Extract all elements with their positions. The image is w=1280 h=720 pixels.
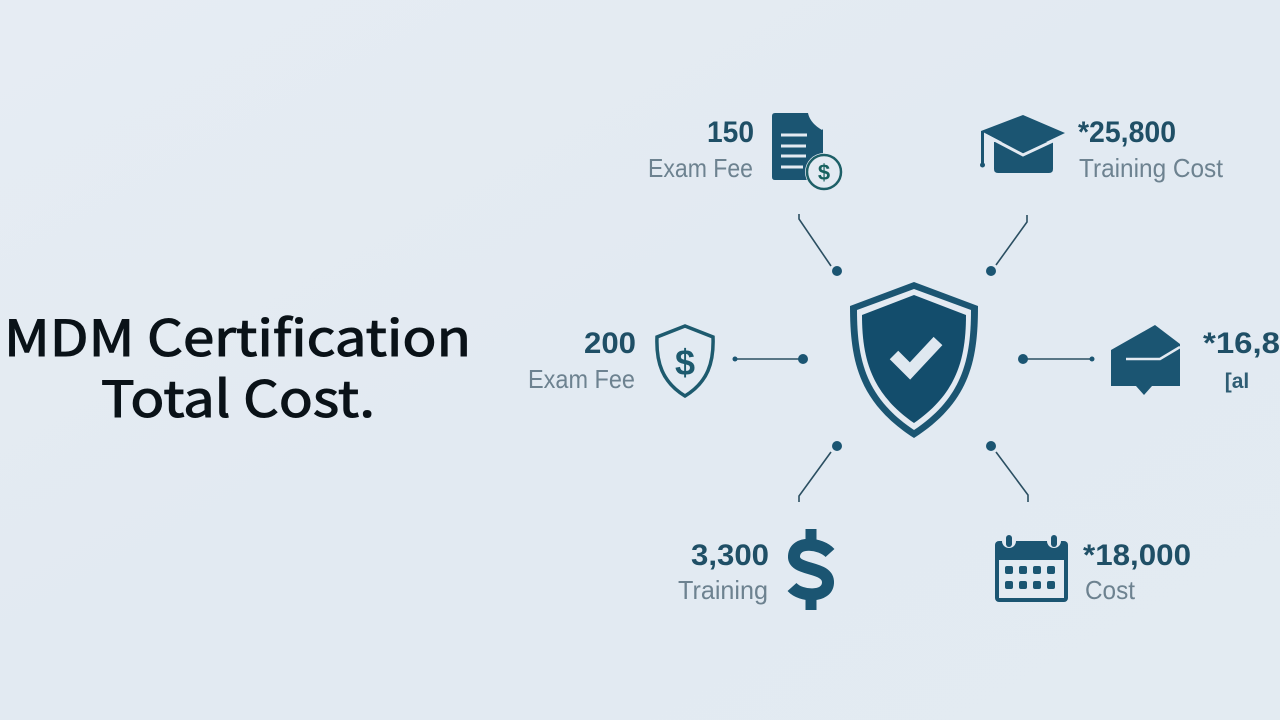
connector: left [732, 354, 808, 364]
icon: calendar [995, 534, 1068, 602]
item: exam fee 200: 200 [584, 327, 636, 360]
icon: graduation cap [980, 115, 1065, 173]
item: exam right amount: [al [1225, 370, 1249, 393]
item: cost 18,000: Cost [1085, 575, 1136, 605]
icon: shield with dollar [657, 326, 713, 396]
connector: bottom right [986, 441, 1028, 502]
central shield icon [850, 282, 978, 438]
icon: document with coin: $ [818, 160, 830, 185]
item: cost 18,000 [1083, 539, 1191, 605]
item: exam fee 150: 150 [707, 116, 754, 149]
item: training 3,300: Training [678, 575, 768, 605]
connector: bottom left [799, 441, 842, 502]
connector: top right [986, 215, 1027, 276]
title [4, 299, 471, 432]
connector: top left [799, 214, 842, 276]
item: exam fee 150: Exam Fee [648, 153, 753, 183]
item: training cost 800: *25,800 [1078, 116, 1176, 149]
icon: open envelope [1111, 325, 1180, 395]
title: MDM Certification [4, 299, 471, 371]
icon: document with coin [772, 113, 843, 191]
icon: dollar sign [792, 529, 830, 610]
item: exam fee 150 [648, 116, 754, 183]
item: training 3,300 [678, 539, 769, 605]
icon: shield with dollar: $ [675, 342, 695, 383]
title: Total Cost. [101, 360, 375, 432]
item: cost 18,000: *18,000 [1083, 539, 1191, 572]
item: training 3,300: 3,300 [691, 539, 769, 572]
item: exam right amount: *16,8 [1203, 327, 1280, 360]
item: training cost 800: Training Cost [1079, 153, 1224, 183]
item: training cost 800 [1078, 116, 1224, 183]
item: exam fee 200: Exam Fee [528, 364, 635, 394]
item: exam fee 200 [528, 327, 636, 394]
connector: right [1018, 354, 1094, 364]
item: exam right amount [1203, 327, 1280, 393]
